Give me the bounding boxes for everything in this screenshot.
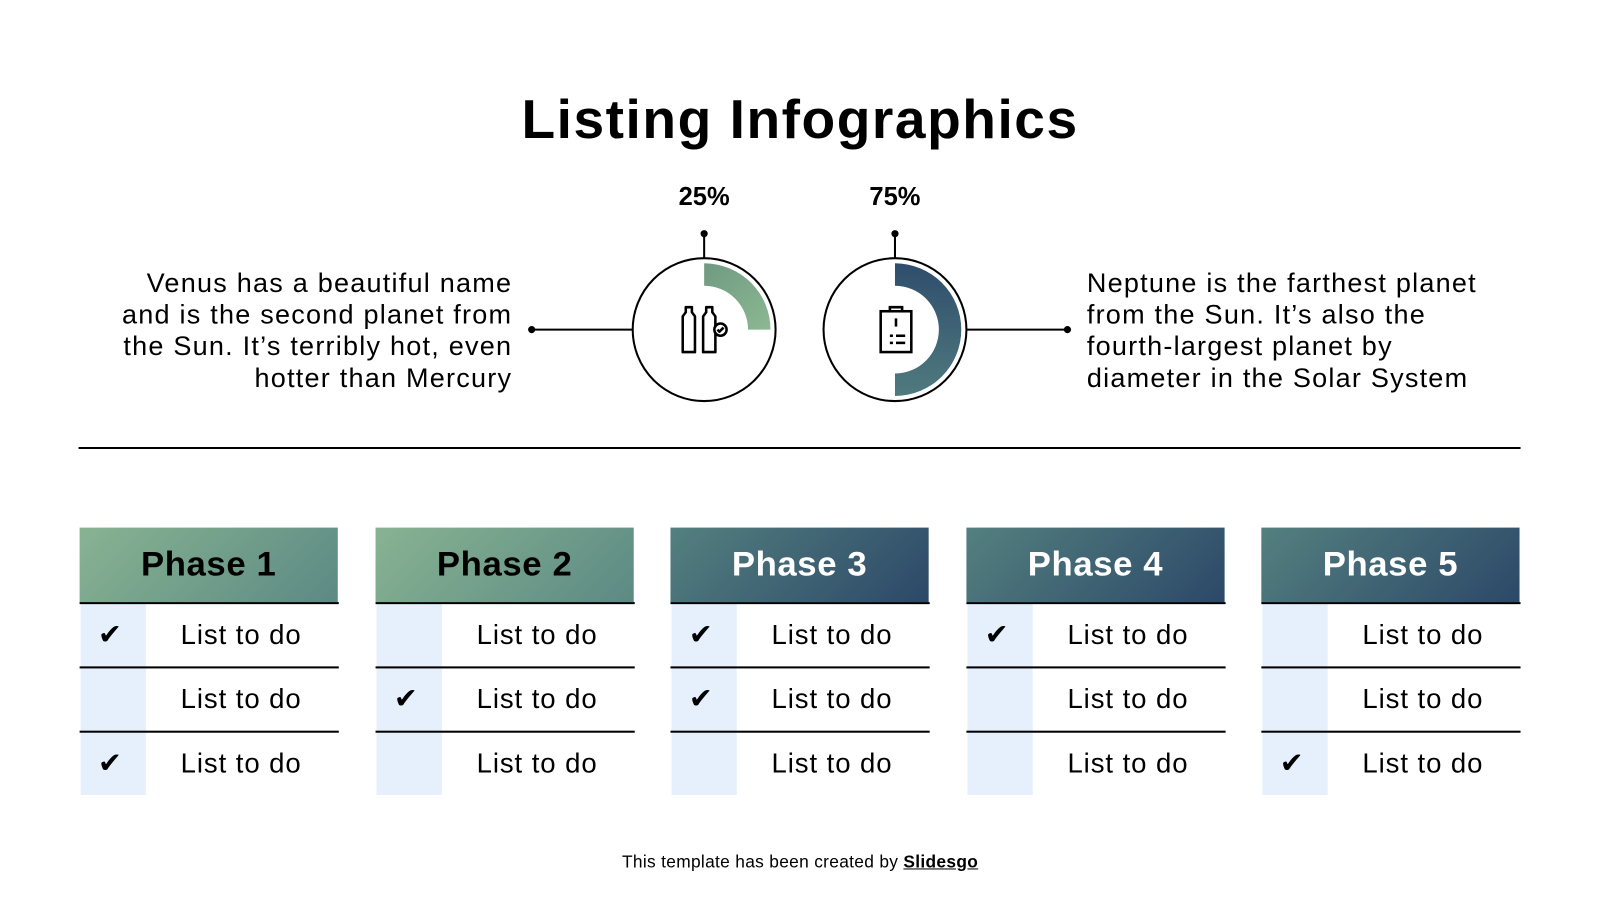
donut: 75% (824, 230, 1071, 401)
panel: phase 1: ✔ (98, 747, 122, 779)
panel: phase 2 (376, 528, 635, 795)
panel: phase 5 (1261, 528, 1521, 795)
text: neptune: fourth-largest planet by (1087, 331, 1393, 361)
panel: phase 3: List to do (771, 684, 893, 714)
panel: phase 1: List to do (181, 684, 302, 714)
panel: phase 3: List to do (771, 748, 893, 779)
panel: phase 1: List to do (181, 748, 302, 779)
panel: phase 2: List to do (477, 619, 598, 650)
panel: phase 5: List to do (1362, 684, 1483, 714)
panel: phase 4: List to do (1067, 684, 1188, 714)
icon: clipboard (881, 307, 911, 352)
panel: phase 3: ✔ (689, 683, 713, 714)
panel: phase 3: List to do (771, 619, 893, 650)
label 75%: 75% (869, 183, 921, 211)
panel: phase 2: List to do (477, 684, 598, 714)
panel: phase 1 (80, 528, 339, 795)
text: venus: Venus has a beautiful name (147, 267, 512, 298)
donut: 25% (528, 230, 776, 401)
text: venus: and is the second planet from (122, 299, 512, 330)
panel: phase 4: Phase 4 (1028, 545, 1163, 584)
panel: phase 4: List to do (1067, 748, 1188, 779)
panel: phase 4: List to do (1067, 619, 1188, 650)
icon: bottles (683, 307, 727, 352)
panel: phase 3: ✔ (689, 618, 713, 650)
panel: phase 3 (670, 528, 930, 795)
text: venus: hotter than Mercury (255, 362, 512, 393)
panel: phase 2: ✔ (394, 683, 418, 714)
text: neptune: Neptune is the farthest planet (1087, 267, 1477, 298)
panel: phase 1: ✔ (98, 618, 122, 650)
panel: phase 1: Phase 1 (141, 545, 276, 584)
panel: phase 4 (966, 528, 1226, 795)
title: Listing Infographics (521, 89, 1079, 150)
footer credit: This template has been created by Slidesgo (622, 852, 978, 872)
text: neptune (1087, 267, 1477, 393)
panel: phase 5: ✔ (1280, 747, 1304, 779)
panel: phase 3: Phase 3 (732, 545, 867, 584)
panel: phase 5: Phase 5 (1323, 545, 1458, 584)
text: neptune: from the Sun. It’s also the (1087, 299, 1426, 330)
text: venus: the Sun. It’s terribly hot, even (123, 331, 512, 361)
text: venus (122, 267, 512, 393)
panel: phase 4: ✔ (985, 618, 1009, 650)
panel: phase 5: List to do (1362, 748, 1483, 779)
panel: phase 2: List to do (477, 748, 598, 779)
label 25%: 25% (679, 183, 730, 211)
panel: phase 5: List to do (1362, 619, 1483, 650)
panel: phase 1: List to do (181, 619, 302, 650)
panel: phase 2: Phase 2 (437, 545, 572, 584)
text: neptune: diameter in the Solar System (1087, 362, 1468, 393)
